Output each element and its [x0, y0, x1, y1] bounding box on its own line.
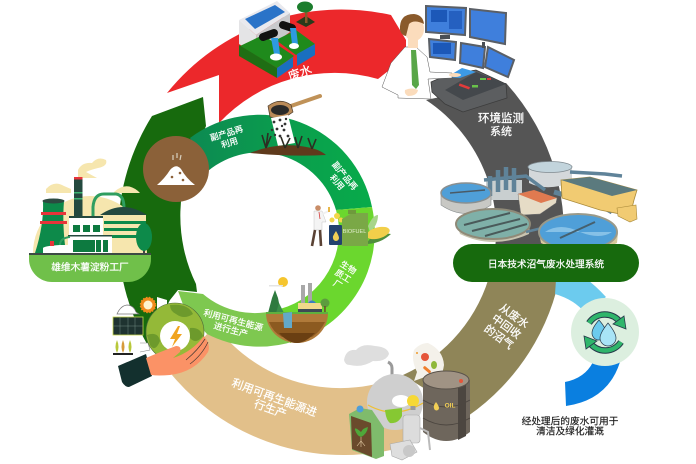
icon: water recycling	[571, 298, 639, 366]
inner ring	[178, 115, 375, 347]
light blue arc	[555, 278, 606, 313]
label: by-product reuse top: 利用	[220, 136, 239, 150]
leaves	[368, 215, 378, 232]
storage tank	[103, 208, 146, 253]
pill: Japanese technology biogas system: 日本技术沼气废水处理系统	[488, 258, 604, 270]
corn	[365, 225, 391, 241]
label: recovered biogas: 中回收	[489, 311, 524, 342]
label: renewable energy production inner: 利用可再生能源	[203, 307, 265, 333]
icon: hand holding green energy globe	[113, 297, 209, 387]
connecting pipe	[526, 228, 542, 232]
label: by-product reuse right: 副产品再	[330, 160, 360, 192]
ring segment: wastewater red	[167, 9, 406, 123]
ring segment: renewable energy tan	[172, 334, 410, 455]
speech bubble	[413, 343, 444, 382]
ring segment: starch factory dark green	[118, 97, 206, 344]
label: renewable energy production inner: 进行生产	[213, 320, 249, 339]
label: wastewater: 废水	[286, 61, 314, 84]
factory backdrop	[33, 196, 147, 253]
label: biomass plant: 厂	[331, 278, 344, 291]
left clarifier tank	[441, 192, 491, 214]
icon: starch factory	[29, 159, 152, 255]
white turbine blades	[157, 297, 167, 312]
label: biomass plant: 生物	[338, 259, 359, 277]
scientist	[312, 205, 330, 246]
pill: Japanese technology biogas system	[453, 244, 639, 282]
globe	[146, 303, 204, 361]
icon: land cross section with power plant	[266, 277, 330, 343]
pill: cassava starch factory	[29, 255, 151, 282]
blue water arc	[555, 278, 620, 406]
label: treated water use	[522, 414, 619, 438]
icon: scientist and biofuel	[312, 205, 391, 246]
dome digester	[388, 362, 392, 382]
label: by-product reuse top: 副产品再	[209, 123, 245, 143]
pill: cassava starch factory: 雄维木薯淀粉工厂	[51, 260, 129, 274]
label: recovered biogas: 从废水	[497, 300, 532, 331]
cooling tower	[35, 201, 66, 253]
label: biomass plant: 质工	[333, 267, 353, 285]
label: environmental monitoring system: 系统	[490, 125, 512, 138]
monitors	[426, 6, 514, 77]
label: environmental monitoring system: 环境监测	[478, 111, 524, 125]
lower right clarifier	[539, 233, 618, 252]
red roof building	[518, 191, 557, 215]
dark blue arc	[565, 362, 620, 406]
label: recovered biogas	[481, 300, 532, 352]
yellow building	[561, 177, 637, 216]
icon: scientist and biofuel: BIOFUEL	[343, 229, 366, 235]
label: renewable energy production outer: 利用可再生能源进	[230, 376, 319, 419]
tree	[143, 245, 145, 254]
grey cloud	[344, 345, 389, 366]
icon: biogas digester, oil drum and jerry can	[344, 343, 470, 460]
label: renewable energy production inner	[200, 307, 265, 343]
ring segment: monitoring grey	[426, 83, 564, 270]
label: environmental monitoring system	[478, 111, 524, 138]
man	[382, 47, 452, 99]
lower left filter bed	[457, 224, 530, 242]
hand	[146, 336, 209, 376]
green plug	[385, 408, 402, 423]
control console	[431, 70, 507, 112]
cuff	[118, 354, 152, 387]
icon: by-product pile in brown circle	[143, 136, 209, 202]
building	[69, 217, 103, 237]
icon: operator and control room	[382, 6, 514, 112]
flowers	[330, 213, 344, 222]
outer ring	[118, 9, 564, 455]
fuel bottle	[329, 225, 342, 245]
icon: wastewater treatment plant	[441, 162, 637, 252]
label: renewable energy production outer: 行生产	[252, 396, 288, 421]
solar panel	[113, 305, 150, 355]
inner segment: biomass plant	[280, 207, 375, 343]
icon: wastewater tanks	[239, 1, 315, 78]
top cylinder tank	[529, 167, 572, 187]
label: recovered biogas: 的沼气	[481, 321, 516, 352]
ring segment: biogas olive	[403, 270, 561, 416]
pipework	[484, 167, 622, 212]
icon: scoop and soil with plants	[250, 96, 326, 156]
oil drum: OIL	[445, 402, 455, 410]
chimney	[74, 178, 82, 218]
label: treated water use: 清洁及绿化灌溉	[536, 424, 604, 438]
label: by-product reuse right: 利用	[328, 172, 346, 192]
pipe arc	[93, 194, 124, 218]
label: treated water use: 经处理后的废水可用于	[522, 414, 619, 428]
label: by-product reuse right	[322, 160, 360, 199]
inner segment: by-product reuse	[190, 115, 372, 210]
jerry can	[342, 213, 368, 246]
label: by-product reuse top	[209, 123, 248, 153]
green jerry can	[349, 408, 384, 459]
sun	[140, 298, 156, 312]
label: biomass plant	[328, 259, 359, 293]
light bulb	[407, 395, 419, 407]
inner segment: renewable energy arrow	[178, 291, 295, 347]
valves and pipes	[390, 415, 430, 460]
